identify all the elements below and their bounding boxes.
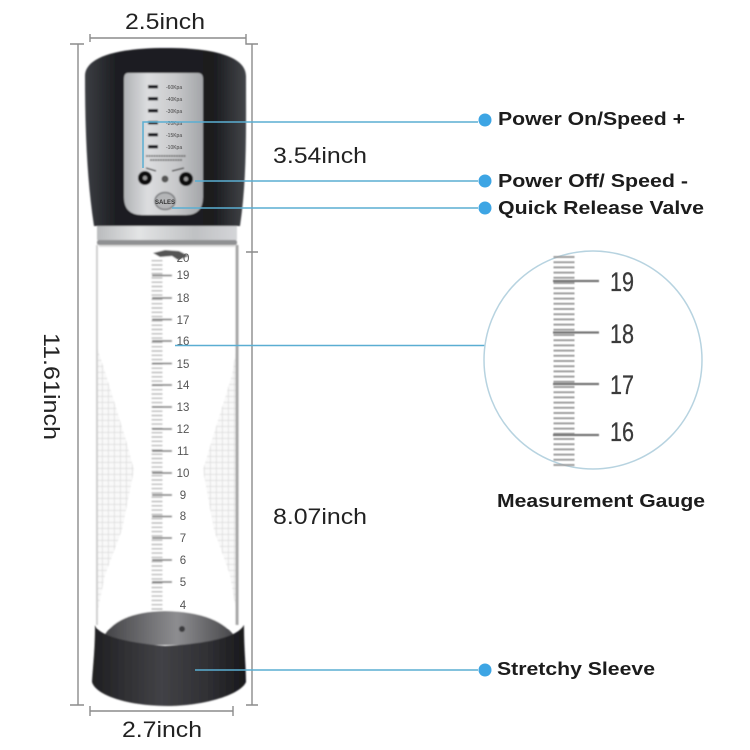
base sleeve [92, 611, 246, 706]
callout: quick release: Quick Release Valve [498, 198, 704, 218]
ruler numbers: 12 [177, 424, 189, 436]
ruler numbers: 5 [180, 577, 186, 589]
magnified ticks [553, 256, 599, 467]
textured grip right [203, 350, 236, 610]
dimension: total height: 11.61inch [39, 333, 64, 440]
magnified numbers [610, 267, 634, 447]
button: quick release valve [155, 192, 175, 210]
pressure labels: -20Kpa [166, 121, 182, 127]
silver control panel [124, 73, 203, 215]
ruler numbers: 8 [180, 511, 186, 523]
callout lines [143, 122, 485, 670]
valve label: SALES [155, 200, 175, 206]
dimension: tube height: 8.07inch [273, 504, 367, 529]
ruler numbers: 20 [177, 253, 189, 265]
ruler numbers: 13 [177, 402, 189, 414]
ruler numbers: 17 [177, 315, 189, 327]
ruler numbers: 9 [180, 490, 186, 502]
magnified numbers: 17 [610, 370, 634, 400]
ruler numbers: 18 [177, 293, 189, 305]
magnified numbers: 18 [610, 319, 634, 349]
pump illustration [85, 48, 246, 706]
gauge caption: Measurement Gauge [497, 491, 705, 511]
dimension: head height: 3.54inch [273, 143, 367, 168]
textured grip left [98, 350, 134, 610]
dimension: base width: 2.7inch [122, 717, 202, 742]
ruler numbers: 19 [177, 270, 189, 282]
pressure labels: -10Kpa [166, 145, 182, 151]
indicator light [162, 176, 168, 182]
silver collar [97, 222, 237, 260]
ruler numbers: 10 [177, 468, 189, 480]
callout: power on: Power On/Speed + [498, 109, 685, 129]
pressure labels: -15Kpa [166, 133, 182, 139]
pressure level bars [148, 85, 158, 148]
pressure labels [166, 85, 182, 151]
pressure labels: -60Kpa [166, 85, 182, 91]
button: power off [179, 172, 193, 186]
dimension: top width: 2.5inch [125, 9, 205, 34]
callout: stretchy sleeve: Stretchy Sleeve [497, 659, 655, 679]
gauge magnifier [484, 251, 702, 469]
ruler numbers: 7 [180, 533, 186, 545]
magnified numbers: 16 [610, 417, 634, 447]
button: power on [138, 171, 152, 185]
ruler numbers: 11 [177, 446, 189, 458]
dimension lines [70, 34, 258, 716]
ruler numbers: 4 [180, 600, 187, 612]
panel small lines [146, 156, 186, 160]
transparent cylinder [97, 238, 237, 628]
ruler numbers: 6 [180, 555, 186, 567]
pressure labels: -40Kpa [166, 97, 182, 103]
callout: power off: Power Off/ Speed - [498, 171, 688, 191]
ruler [152, 260, 172, 612]
ruler numbers: 14 [177, 380, 190, 392]
magnified numbers: 19 [610, 267, 634, 297]
ruler numbers [177, 253, 190, 612]
black pump head [85, 48, 246, 226]
pressure labels: -30Kpa [166, 109, 182, 115]
ruler numbers: 15 [177, 359, 189, 371]
ruler numbers: 16 [177, 336, 189, 348]
